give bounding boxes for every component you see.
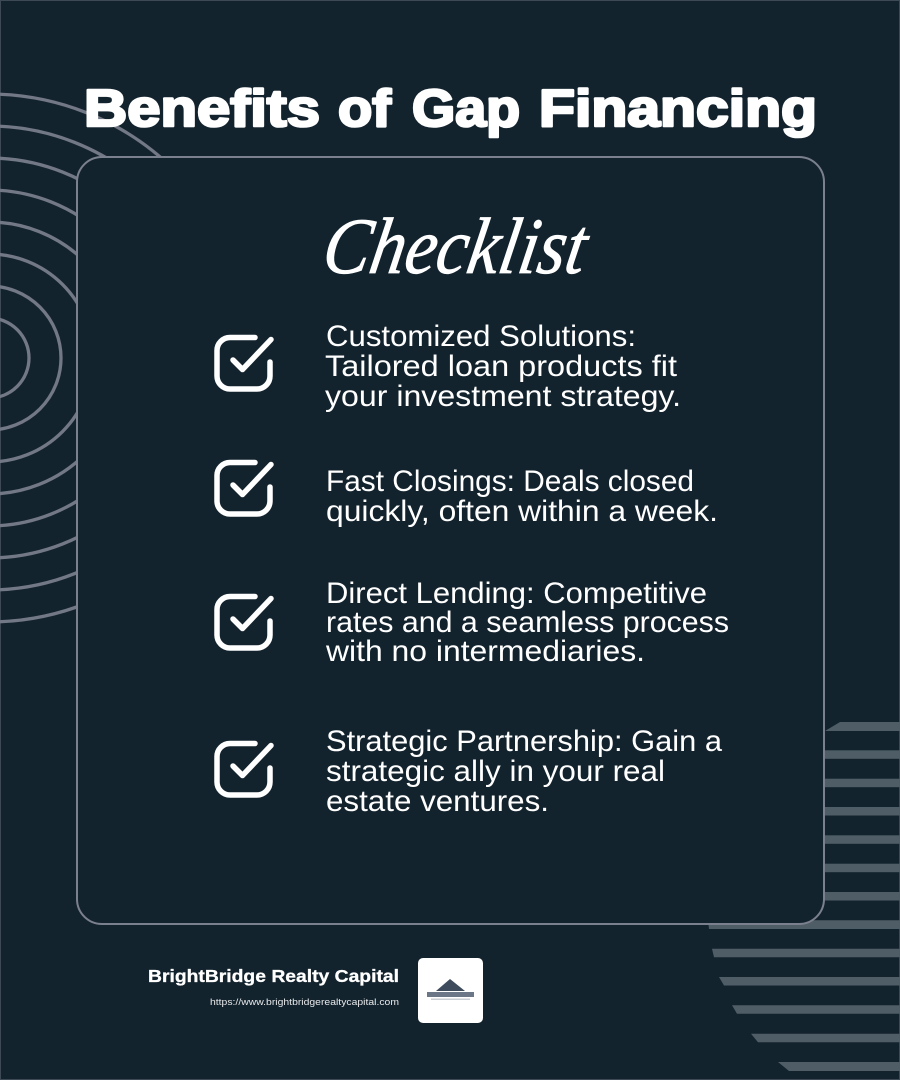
item text bbox=[326, 465, 718, 528]
footer: brand bbox=[148, 966, 399, 1008]
item text: Direct Lending: Competitive bbox=[326, 577, 707, 610]
item text: Fast Closings: Deals closed bbox=[326, 465, 694, 498]
icon: checkbox bbox=[217, 462, 271, 514]
title: Financing bbox=[539, 80, 817, 138]
item text: your investment strategy. bbox=[325, 380, 681, 413]
brand url: https://www.brightbridgerealtycapital.com bbox=[210, 997, 399, 1008]
item text: strategic ally in your real bbox=[326, 755, 665, 788]
item text bbox=[326, 725, 722, 818]
title: of bbox=[338, 80, 392, 138]
item text: Strategic Partnership: Gain a bbox=[326, 725, 722, 758]
decorative stripes bbox=[708, 722, 900, 1071]
item text: rates and a seamless process bbox=[326, 606, 729, 639]
item text: with no intermediaries. bbox=[325, 635, 645, 668]
item text: estate ventures. bbox=[326, 785, 549, 818]
decorative concentric arcs bbox=[0, 94, 253, 622]
item 4 bbox=[217, 725, 722, 818]
icon: checkbox bbox=[217, 596, 271, 648]
title: Gap bbox=[412, 80, 520, 138]
icon: checkbox bbox=[217, 744, 271, 795]
item text bbox=[325, 577, 729, 668]
title bbox=[84, 80, 817, 138]
item 1 bbox=[217, 320, 681, 413]
title: Benefits bbox=[84, 80, 320, 138]
panel: checklist bbox=[77, 157, 824, 924]
item text bbox=[325, 320, 681, 413]
item 2 bbox=[217, 462, 718, 528]
icon: checkbox bbox=[217, 338, 271, 389]
item text: quickly, often within a week. bbox=[326, 495, 718, 528]
checklist heading: Checklist bbox=[317, 203, 597, 291]
brand name: BrightBridge Realty Capital bbox=[148, 966, 399, 986]
logo bbox=[418, 958, 483, 1023]
item text: Customized Solutions: bbox=[326, 320, 636, 353]
item 3 bbox=[217, 577, 729, 668]
item text: Tailored loan products fit bbox=[325, 350, 678, 383]
